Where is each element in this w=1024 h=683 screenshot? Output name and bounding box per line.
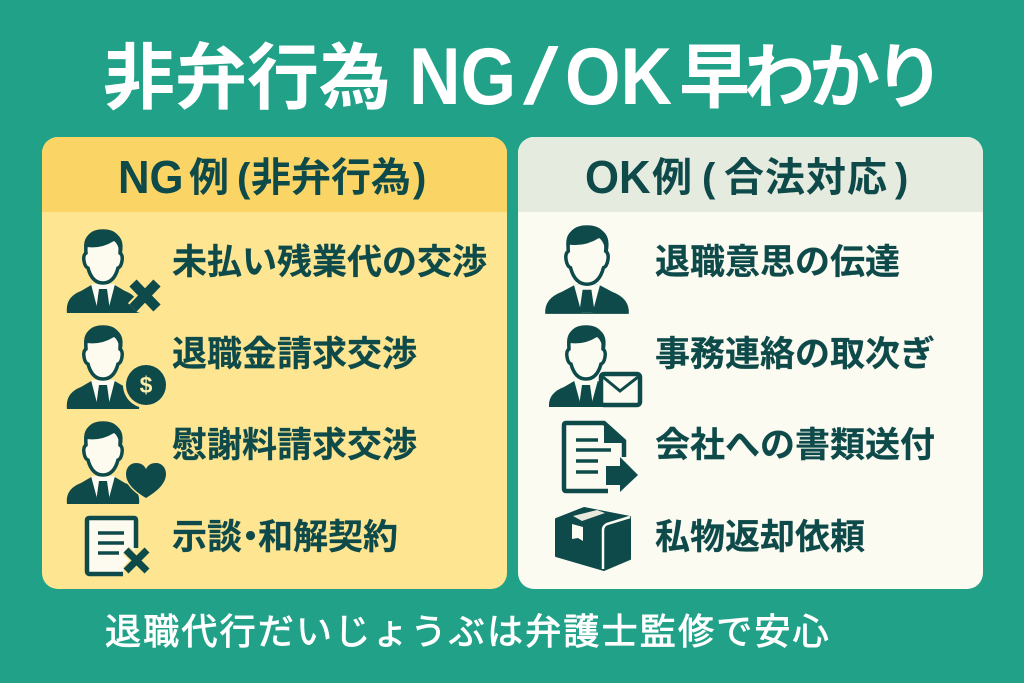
- NG item 3 text: 慰謝料請求交渉: [172, 426, 417, 465]
- OK item 4 text: 私物返却依頼: [655, 518, 865, 557]
- title: 非弁行為: [103, 39, 391, 119]
- panel: OK examples: [518, 137, 983, 589]
- heading: NG: (: [237, 156, 250, 200]
- footer note: 退職代行だいじょうぶは弁護士監修で安心: [105, 611, 831, 652]
- OK item 1 text: 退職意思の伝達: [655, 243, 900, 282]
- heading: OK: [585, 151, 908, 203]
- heading: OK: 合法対応: [724, 156, 888, 200]
- NG item 4 text: [172, 518, 398, 557]
- icon: person with envelope: [549, 327, 640, 407]
- heading: NG: [118, 151, 426, 203]
- NG item 4 text: 和解契約: [258, 518, 398, 557]
- heading: NG: ): [413, 156, 426, 200]
- title: [103, 31, 939, 121]
- icon: person with heart: [67, 423, 166, 504]
- icon: document with cross: [87, 518, 147, 575]
- NG item 4 text: 示談: [172, 518, 242, 557]
- OK item 3 text: 会社への書類送付: [655, 426, 935, 465]
- title: 早わかり: [679, 39, 939, 118]
- NG item 2 text: 退職金請求交渉: [172, 335, 417, 374]
- OK item 2 text: 事務連絡の取次ぎ: [655, 335, 935, 374]
- NG panel header band: [42, 137, 507, 212]
- title: NG: [409, 31, 516, 121]
- heading: NG: 非弁行為: [251, 156, 411, 200]
- NG item 4 text: ・: [233, 518, 268, 557]
- OK panel header band: [518, 137, 983, 212]
- icon: person with cross: [67, 231, 157, 313]
- icon: person with dollar coin: [67, 327, 169, 409]
- icon: person: [545, 227, 629, 314]
- heading: OK: OK: [585, 151, 651, 203]
- heading: OK: (: [702, 156, 715, 200]
- NG item 1 text: 未払い残業代の交渉: [172, 243, 487, 282]
- heading: NG: 例: [189, 156, 229, 200]
- icon: cardboard box: [556, 508, 630, 570]
- title: /: [523, 32, 559, 121]
- icon: person with dollar coin: $: [140, 372, 153, 398]
- heading: OK: ): [895, 156, 908, 200]
- heading: OK: 例: [652, 156, 692, 200]
- title: OK: [565, 31, 672, 121]
- panel: NG examples: [42, 137, 507, 589]
- heading: NG: NG: [118, 151, 184, 203]
- icon: document with arrow: [564, 423, 638, 492]
